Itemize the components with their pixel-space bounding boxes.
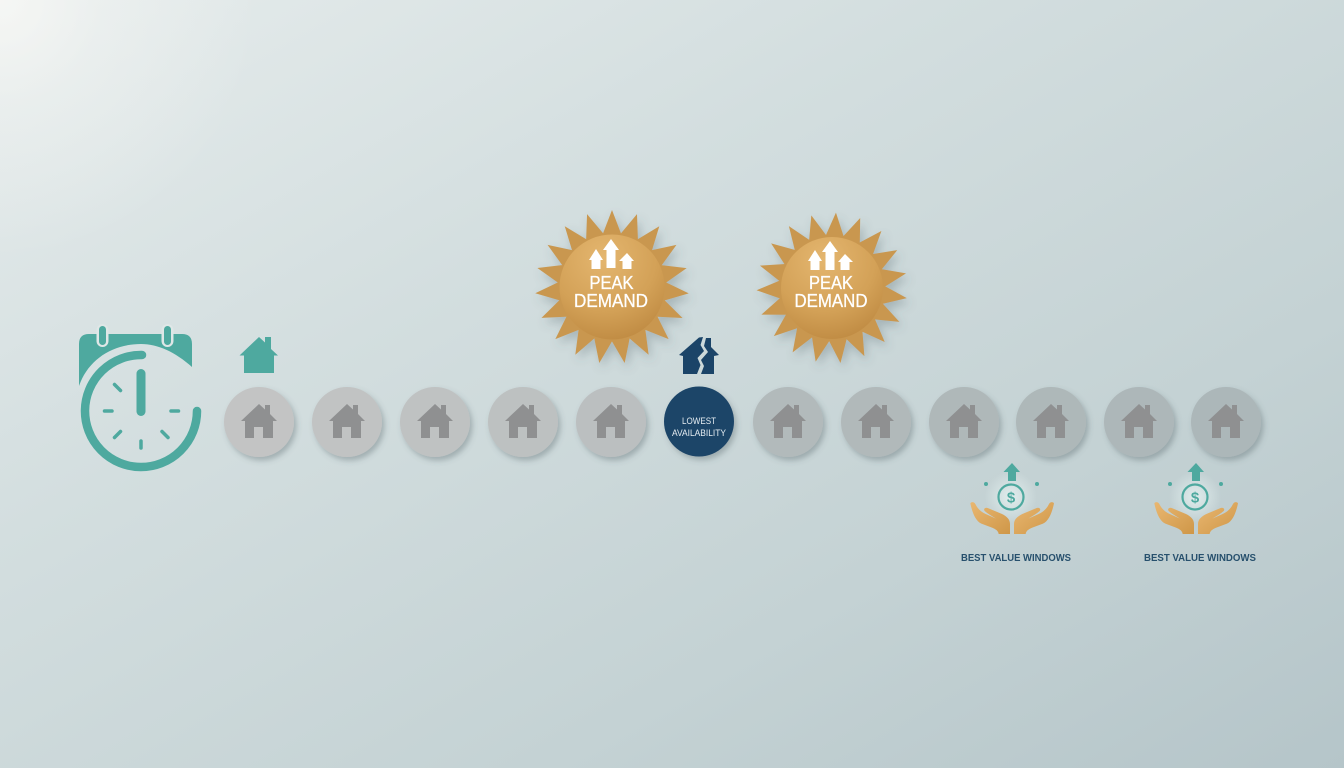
circle 2 <box>312 387 382 457</box>
circle 1 <box>224 387 294 457</box>
circle 12 <box>1191 387 1261 457</box>
circle 6: lowest availability: LOWEST <box>682 416 716 426</box>
icon: calendar clock <box>79 324 197 467</box>
peak demand sun 2 <box>756 212 908 364</box>
peak demand sun 1 <box>534 210 690 365</box>
best value window 2 <box>1144 463 1256 564</box>
icon: rising arrows <box>589 239 634 269</box>
sun label: PEAK <box>809 273 853 293</box>
icon: rising arrows <box>808 241 853 270</box>
circle 9 <box>929 387 999 457</box>
icon: broken house <box>679 337 719 374</box>
circle 6: lowest availability <box>664 386 734 456</box>
sun label: PEAK <box>590 273 634 293</box>
best value window 2: $ <box>1191 490 1200 506</box>
circle 7 <box>753 387 823 457</box>
best value window 1 <box>961 463 1071 564</box>
timeline of house circles <box>224 386 1261 457</box>
circle 10 <box>1016 387 1086 457</box>
icon: teal house <box>240 337 278 373</box>
sun label: DEMAND <box>574 291 648 311</box>
sun label: DEMAND <box>794 291 868 311</box>
label: BEST VALUE WINDOWS <box>1144 552 1256 564</box>
circle 8 <box>841 387 911 457</box>
circle 6: lowest availability: AVAILABILITY <box>672 428 726 438</box>
best value window 1: $ <box>1007 490 1016 506</box>
circle 5 <box>576 387 646 457</box>
circle 4 <box>488 387 558 457</box>
circle 3 <box>400 387 470 457</box>
label: BEST VALUE WINDOWS <box>961 552 1071 564</box>
circle 11 <box>1104 387 1174 457</box>
